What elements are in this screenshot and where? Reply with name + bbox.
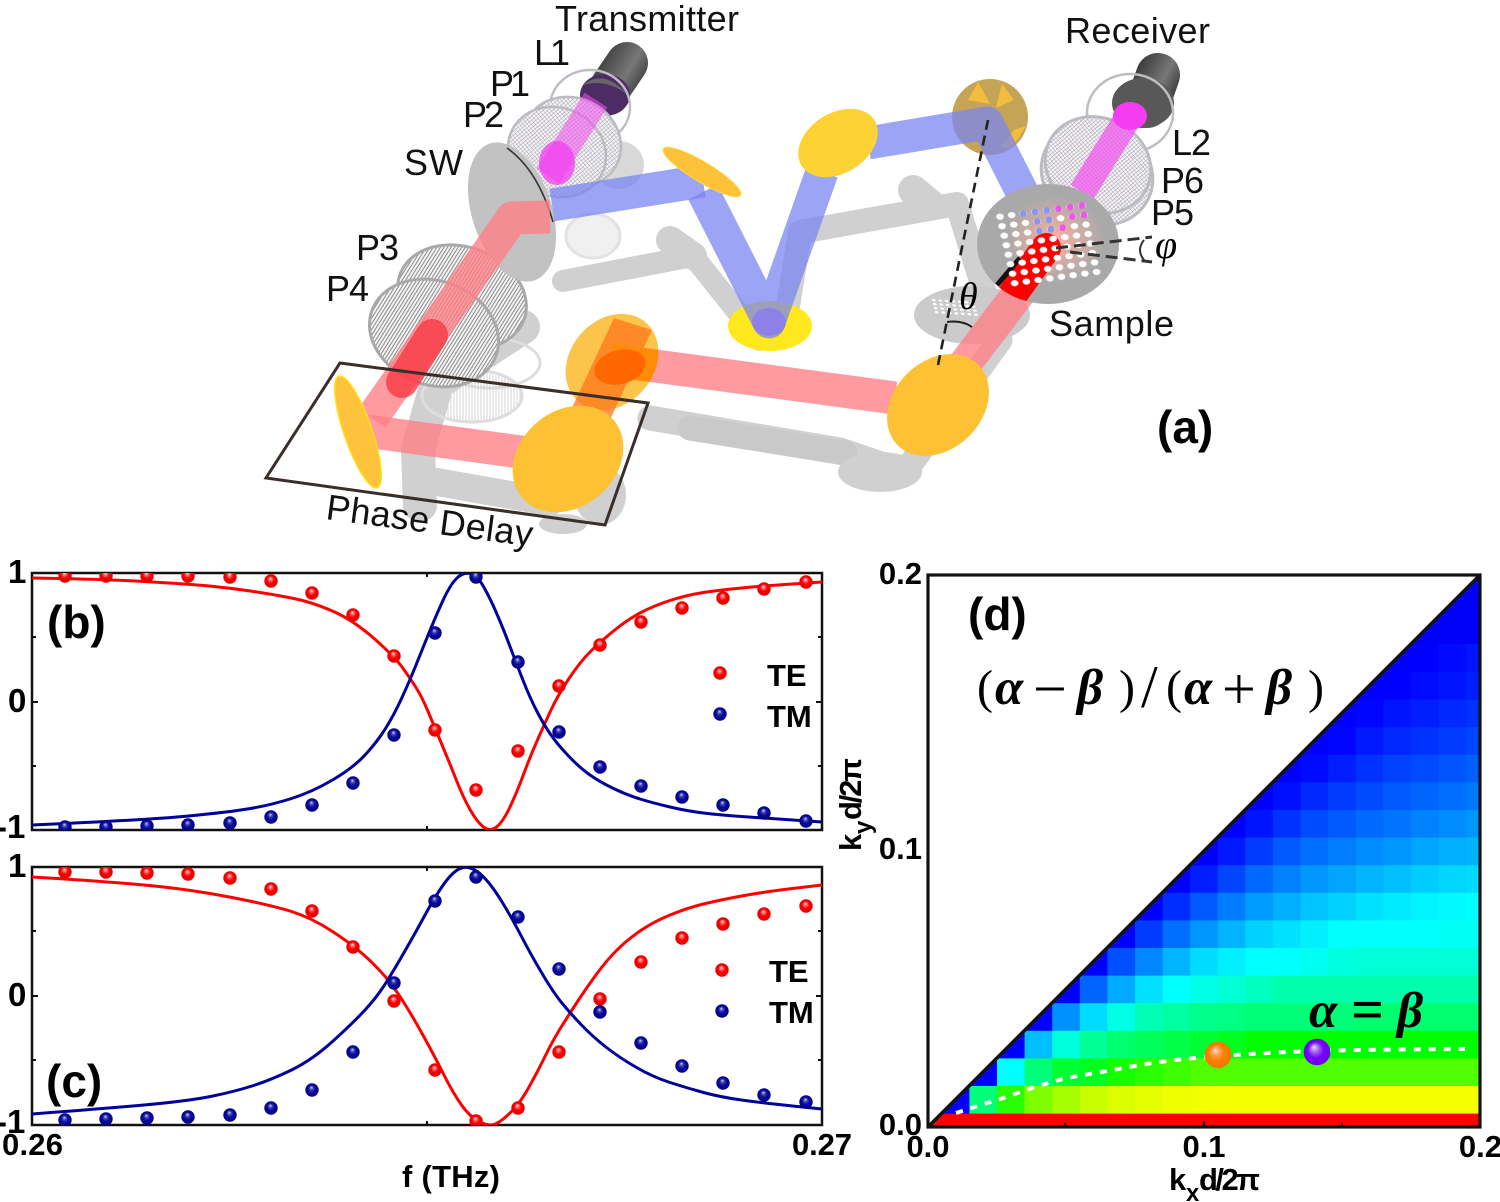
- TE data points: [58, 865, 813, 1128]
- y axis title: y: [850, 820, 877, 834]
- optical labels: SW: [404, 142, 463, 183]
- dashed alpha equals beta curve: [956, 1049, 1465, 1113]
- heat map cells: [928, 561, 1495, 1127]
- terahertz beam near the transmitter: [539, 100, 596, 185]
- large mirror before the sample: [867, 334, 1009, 476]
- optical labels: P3: [356, 227, 399, 268]
- beam splitter mirror M3: [952, 79, 1028, 155]
- ratio formula: ): [1119, 661, 1135, 714]
- panel label d: (d): [968, 588, 1027, 640]
- lens L1: [550, 70, 630, 144]
- alpha equals beta annotation: =: [1351, 977, 1384, 1042]
- frequency axis labels: 0.26: [2, 1127, 63, 1162]
- ratio formula: α: [1184, 660, 1213, 716]
- y axis numbers: 0.1: [879, 831, 922, 866]
- y axis numbers: 1: [8, 847, 26, 884]
- flat mirror M1: [658, 140, 746, 204]
- panel label c: (c): [46, 1055, 102, 1107]
- legend: TM: [767, 699, 812, 734]
- ratio formula: (: [977, 661, 993, 714]
- legend: TM: [769, 995, 814, 1030]
- alpha equals beta annotation: β: [1395, 983, 1423, 1039]
- flat mirror M2: [786, 95, 890, 191]
- x axis title: k: [1169, 1162, 1187, 1197]
- y axis numbers: 0.0: [879, 1107, 922, 1142]
- y axis numbers: 0: [8, 682, 26, 719]
- diagonal edge and plot frame: [928, 575, 1480, 1127]
- purple marker sphere: [1304, 1039, 1330, 1065]
- switch SW: [452, 131, 572, 293]
- beam spot on the apex mirror: [752, 308, 786, 336]
- optical labels: φ: [1155, 222, 1177, 267]
- panel (a): experimental setup schematic: [266, 0, 1213, 554]
- ratio formula: α: [995, 660, 1024, 716]
- mirror pair in the phase delay stage: [326, 295, 895, 534]
- ratio formula: (: [1166, 661, 1182, 714]
- panel (b): TE and TM spectra, first configuration: [0, 553, 822, 845]
- dark red beam through P3 and P4: [402, 335, 432, 382]
- frequency axis labels: [2, 1127, 852, 1194]
- panel label b: (b): [47, 596, 106, 648]
- y axis numbers: [879, 556, 922, 1142]
- yellow mirror at beam apex: [728, 301, 812, 351]
- transmitter head: [580, 63, 630, 116]
- legend: TE: [769, 954, 809, 989]
- frequency axis labels: f (THz): [402, 1159, 500, 1194]
- azimuth angle phi markers: [1056, 237, 1152, 262]
- rear polarizers P3 and P4: [354, 227, 541, 404]
- panel (c): TE and TM spectra, second configuration: [0, 847, 852, 1194]
- x axis numbers: 0.0: [906, 1129, 950, 1164]
- optical labels: Receiver: [1065, 10, 1210, 51]
- x axis numbers: [906, 1129, 1500, 1164]
- optical labels: Sample: [1049, 303, 1174, 344]
- y axis numbers: 0.2: [879, 556, 922, 591]
- cast shadows on the table: [418, 141, 1030, 534]
- polarizers P5 and P6: [1024, 100, 1170, 243]
- optical labels: P4: [326, 268, 369, 309]
- legend: [715, 954, 814, 1030]
- y axis title: k: [833, 833, 868, 851]
- y axis numbers: 0: [8, 976, 26, 1013]
- terahertz beam near the receiver: [1082, 102, 1147, 192]
- fit curves: [32, 867, 822, 1125]
- frequency axis labels: 0.27: [792, 1127, 852, 1162]
- optical labels: Phase Delay: [324, 486, 536, 554]
- polarizers P1 and P2: [493, 81, 636, 213]
- legend: TE: [767, 658, 807, 693]
- red beam path: [366, 217, 1025, 453]
- legend: [713, 658, 812, 734]
- incidence angle theta markers: [938, 120, 988, 365]
- TM data points: [58, 870, 813, 1127]
- ratio formula: β: [1075, 660, 1103, 716]
- ratio formula: β: [1264, 660, 1292, 716]
- optical labels: P6: [1161, 160, 1204, 201]
- sample disk with hole array: [977, 184, 1119, 312]
- optical labels: P1: [490, 63, 530, 104]
- lens L2: [1087, 74, 1173, 152]
- optical labels: P2: [463, 94, 504, 135]
- y axis title: d/2π: [833, 758, 868, 820]
- panel (d): heat map of alpha and beta ratio: [833, 556, 1500, 1202]
- optical labels: L2: [1172, 122, 1211, 163]
- ratio formula: ): [1308, 661, 1324, 714]
- optical labels: (a): [1157, 401, 1213, 453]
- TE data points: [58, 569, 813, 797]
- TM data points: [58, 570, 813, 834]
- ratio formula: +: [1222, 656, 1256, 722]
- y axis numbers: [0, 553, 26, 845]
- ratio formula: [977, 654, 1324, 722]
- x axis title: d/2π: [1199, 1162, 1260, 1197]
- x axis numbers: 0.1: [1182, 1129, 1226, 1164]
- receiver head: [1112, 75, 1174, 128]
- y axis numbers: 1: [8, 553, 26, 590]
- optical labels: L1: [534, 32, 570, 73]
- plot frame and ticks: [32, 867, 822, 1125]
- ratio formula: /: [1141, 654, 1158, 720]
- optical labels: [324, 0, 1213, 554]
- optical labels: P5: [1151, 192, 1194, 233]
- optical labels: θ: [959, 276, 978, 318]
- blue beam path: [552, 123, 1024, 322]
- white upper triangle: [928, 575, 1480, 1127]
- ratio formula: −: [1033, 656, 1067, 722]
- orange marker sphere: [1205, 1042, 1231, 1068]
- plot frame and ticks: [32, 573, 822, 830]
- y axis numbers: [0, 847, 26, 1140]
- alpha equals beta annotation: α: [1309, 983, 1338, 1039]
- phase delay frame: [266, 363, 648, 525]
- fit curves: [32, 573, 822, 830]
